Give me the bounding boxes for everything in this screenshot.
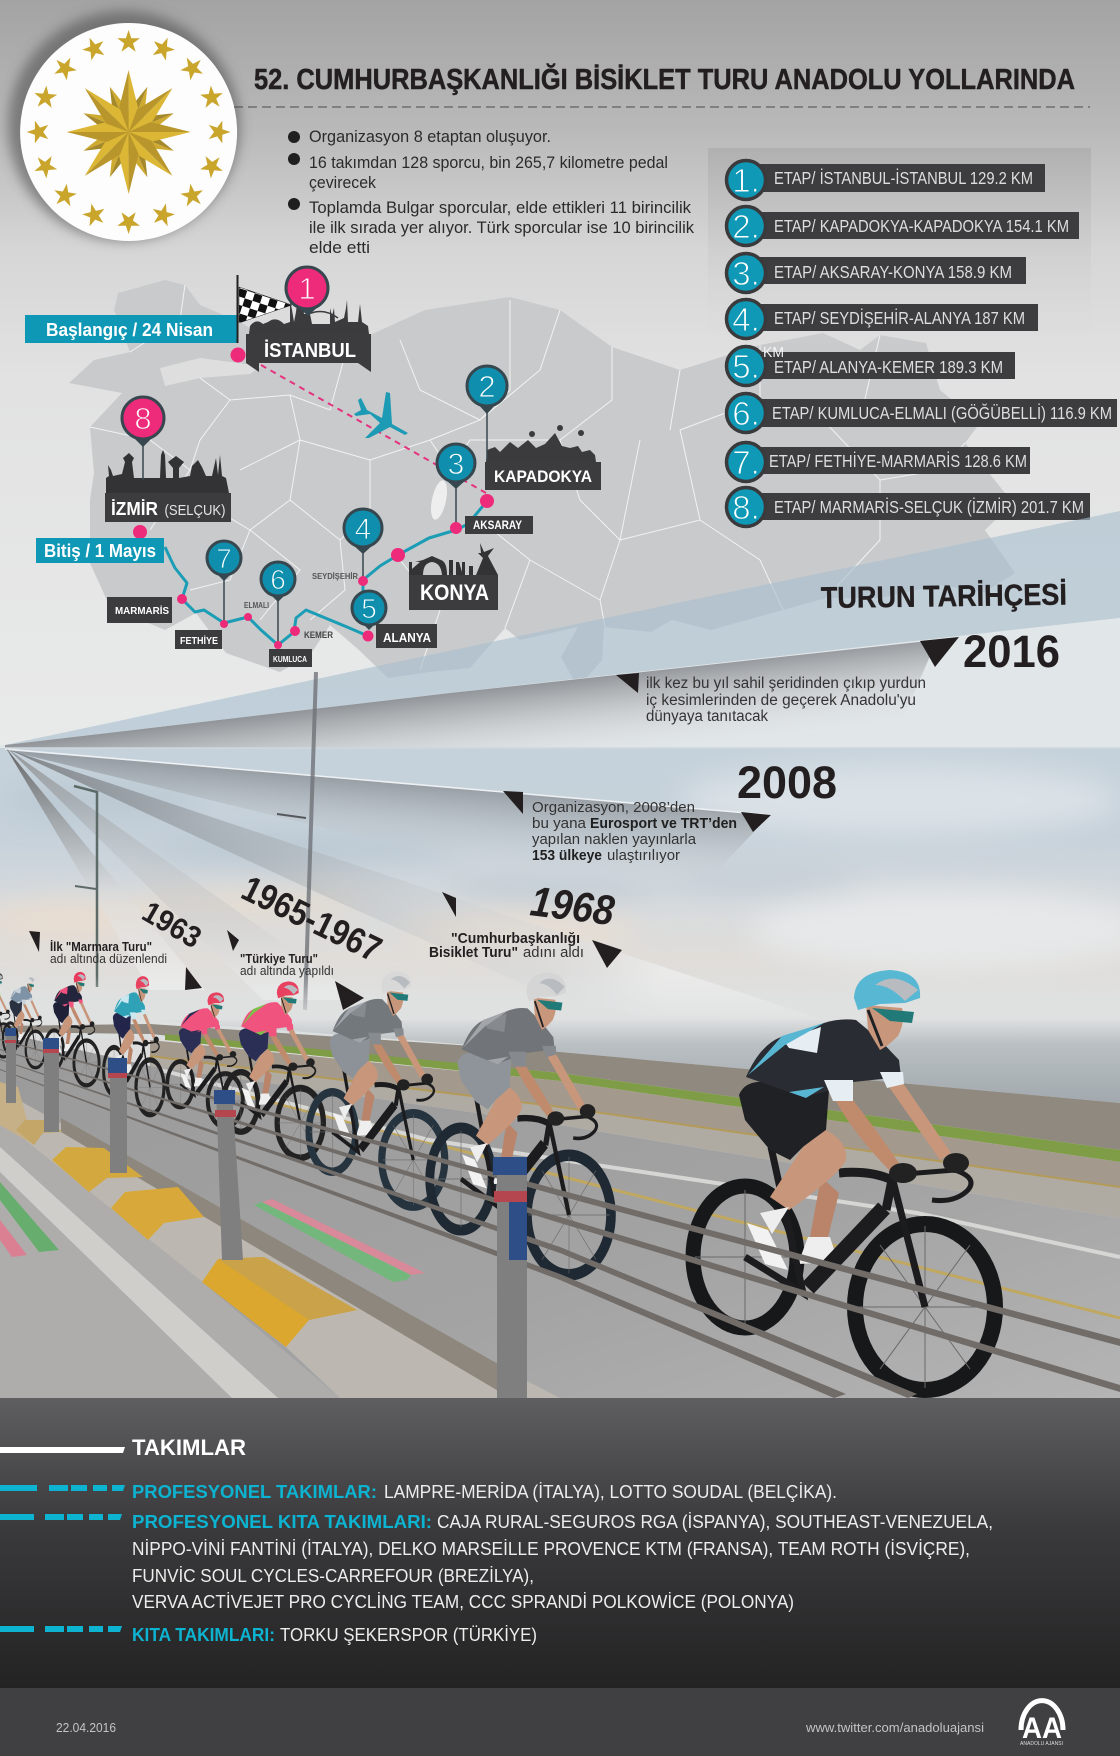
footer: date: 22.04.2016 [56, 1720, 116, 1735]
panel: stage list: 4. [732, 301, 760, 338]
timeline 2008: 2008 [737, 757, 837, 808]
dot: Marmaris [177, 594, 187, 604]
label: Kumluca [269, 649, 312, 667]
start label [25, 315, 237, 343]
dot: Konya [391, 548, 405, 562]
wedge: 1963 [6, 748, 205, 990]
label: Fethiye [175, 630, 222, 649]
dot: Kemer [290, 626, 300, 636]
panel: stage list: 2. [732, 208, 760, 245]
Izmir skyline and label: (SELÇUK) [164, 502, 226, 519]
team list [0, 1481, 993, 1645]
team list: PROFESYONEL TAKIMLAR: [132, 1481, 377, 1502]
heading: teams: TAKIMLAR [132, 1435, 246, 1460]
dot: Istanbul start [230, 348, 246, 362]
dot: Kapadokya end of flight [480, 494, 494, 508]
text block: key facts [288, 128, 695, 257]
pin 3 [437, 444, 475, 523]
finish label: Bitiş / 1 Mayıs [44, 541, 156, 561]
team list: VERVA ACTİVEJET PRO CYCLİNG TEAM, CCC SPRANDİ POLKOWİCE (POLONYA) [132, 1591, 794, 1612]
timeline 2016: dünyaya tanıtacak [646, 708, 768, 725]
timeline 2008: ulaştırılıyor [607, 847, 680, 864]
timeline 1965-1967: 1965-1967 [235, 867, 388, 970]
pin 4: 4 [355, 513, 371, 546]
text block: key facts: 16 takımdan 128 sporcu, bin 265,7 kilometre pedal [309, 154, 668, 172]
wedge: 1965-1967 [8, 749, 363, 1000]
team list: CAJA RURAL-SEGUROS RGA (İSPANYA), SOUTHEAST-VENEZUELA, [437, 1511, 993, 1532]
wedge: 1968 [10, 750, 824, 1020]
team list: PROFESYONEL KITA TAKIMLARI: [132, 1511, 432, 1532]
Istanbul skyline and label [246, 285, 371, 372]
panel: stage list: 8. [732, 489, 760, 526]
photo: road median with yellow blocks [0, 1082, 560, 1398]
Izmir skyline and label: İZMİR [111, 499, 158, 519]
team list: KITA TAKIMLARI: [132, 1624, 275, 1645]
pin 6: 6 [270, 564, 286, 595]
panel: stage list backdrop [708, 148, 1091, 348]
text block: key facts: Organizasyon 8 etaptan oluşuyor. [309, 128, 551, 146]
timeline 2016: ilk kez bu yıl sahil şeridinden çıkıp yurdun [646, 675, 926, 692]
label: Elmalı: ELMALI [244, 601, 269, 610]
team list: TORKU ŞEKERSPOR (TÜRKİYE) [280, 1624, 537, 1645]
panel: stage list: ETAP/ İSTANBUL-İSTANBUL 129.2 KM [774, 168, 1033, 188]
pin 1 [286, 267, 328, 316]
pin 6 [261, 562, 295, 643]
wedge: 2008 [5, 750, 770, 900]
pin 5 [352, 591, 386, 630]
text block: key facts: ile ilk sırada yer alıyor. Türk sporcular ise 10 birincilik [309, 219, 695, 237]
panel: stage list: 6. [732, 395, 760, 432]
panel: stage list: ETAP/ KAPADOKYA-KAPADOKYA 154.1 KM [774, 216, 1069, 236]
panel: stage list: ETAP/ ALANYA-KEMER 189.3 KM [774, 357, 1003, 377]
start label: Başlangıç / 24 Nisan [46, 320, 213, 340]
icon: cyclist group [0, 970, 995, 1390]
label: Aksaray: AKSARAY [473, 520, 522, 532]
Konya skyline and label: KONYA [420, 580, 489, 605]
timeline 1963: 1963 [136, 895, 207, 955]
label: Marmaris: MARMARİS [115, 604, 169, 617]
timeline 1968: 1968 [528, 877, 618, 934]
timeline 2008: 153 ülkeye [532, 847, 602, 864]
icon: airplane [354, 392, 408, 438]
lamp posts [74, 672, 316, 1010]
timeline 2016: iç kesimlerinden de geçerek Anadolu'yu [646, 692, 916, 709]
pin 8: 8 [134, 401, 152, 436]
route: Istanbul to Aksaray flight path [261, 365, 486, 493]
Izmir skyline and label [105, 450, 231, 522]
timeline 1965-1967: adı altında yapıldı [240, 963, 334, 978]
timeline 1963: adı altında düzenlendi [50, 951, 167, 966]
route: cycling stages [165, 501, 487, 645]
label: Kemer: KEMER [304, 630, 333, 640]
timeline 2016 [616, 626, 1060, 725]
timeline 2008: yapılan naklen yayınlarla [532, 831, 697, 848]
panel: stage list: 7. [732, 444, 760, 481]
blue band of 2016 wedge [5, 511, 1120, 745]
pin 7 [207, 541, 241, 622]
team list: LAMPRE-MERİDA (İTALYA), LOTTO SOUDAL (BELÇİKA). [384, 1481, 837, 1502]
dot: Kumluca [274, 641, 282, 649]
timeline 2008: bu yana [532, 815, 587, 832]
pin 2 [467, 366, 507, 460]
Kapadokya skyline and label: KAPADOKYA [494, 467, 592, 486]
dot: Fethiye [220, 620, 228, 628]
icon: Anadolu Agency logo: ANADOLU AJANSI [1020, 1741, 1063, 1747]
text block: key facts: Toplamda Bulgar sporcular, elde ettikleri 11 birincilik [309, 199, 692, 217]
dot: Aksaray [450, 522, 462, 534]
label: Alanya: ALANYA [383, 630, 432, 645]
team list: NİPPO-VİNİ FANTİNİ (İTALYA), DELKO MARSEİLLE PROVENCE KTM (FRANSA), TEAM ROTH (İSVİÇRE), [132, 1538, 970, 1559]
team list: FUNVİC SOUL CYCLES-CARREFOUR (BREZİLYA), [132, 1565, 534, 1586]
Konya skyline and label [409, 543, 498, 610]
panel: stage list: ETAP/ FETHİYE-MARMARİS 128.6 KM [769, 451, 1027, 471]
footer: twitter link: www.twitter.com/anadoluajansi [805, 1720, 984, 1735]
Kapadokya skyline and label [485, 425, 601, 490]
timeline 1968: "Cumhurbaşkanlığı [451, 930, 580, 947]
panel: stage list: 3. [732, 255, 760, 292]
wedge: 2016 shadow [5, 640, 937, 748]
dot: Izmir finish [133, 525, 147, 539]
panel: stage list [726, 160, 1117, 526]
timeline 2008: Organizasyon, 2008’den [532, 799, 695, 816]
panel: stage list: KM [763, 344, 784, 361]
dot: Seydişehir [358, 576, 368, 586]
pin 5: 5 [361, 593, 377, 624]
panel: stage list: 5. [732, 348, 760, 385]
text block: key facts: elde etti [309, 239, 370, 257]
Istanbul skyline and label: İSTANBUL [264, 339, 356, 362]
pin 3: 3 [448, 448, 464, 481]
sky backdrop [0, 618, 1120, 1038]
timeline 1963 [29, 895, 207, 990]
label: Fethiye: FETHİYE [180, 634, 218, 647]
pin 4 [344, 509, 382, 577]
icon: Anadolu Agency logo [1020, 1701, 1063, 1747]
timeline 1968: Bisiklet Turu" [429, 944, 518, 961]
dot: Elmalı [244, 613, 252, 621]
panel: stage list: ETAP/ SEYDİŞEHİR-ALANYA 187 KM [774, 308, 1025, 328]
timeline 1968 [429, 877, 622, 968]
page background [0, 0, 1120, 760]
emblem: presidential seal [8, 11, 240, 241]
panel: stage list: 1. [732, 162, 760, 199]
timeline 1965-1967 [227, 867, 388, 1010]
heading: tour history: TURUN TARİHÇESİ [821, 579, 1067, 615]
label: Kumluca: KUMLUCA [273, 655, 307, 664]
dot: Alanya [362, 630, 374, 642]
label: Seydişehir: SEYDİŞEHİR [312, 572, 358, 581]
pin 7: 7 [216, 543, 232, 574]
photo: guard rail posts and cables [0, 1028, 1120, 1398]
icon: Anadolu Agency logo: AA [1022, 1712, 1062, 1745]
map of Turkey [69, 280, 1015, 688]
photo: seafront and road [0, 975, 1120, 1398]
panel: stage list: ETAP/ AKSARAY-KONYA 158.9 KM [774, 262, 1012, 282]
label: Aksaray [465, 516, 533, 534]
timeline 2008 [503, 757, 837, 864]
pin 8 [122, 397, 164, 480]
label: Marmaris [107, 597, 172, 623]
dark panel: teams [0, 1398, 1120, 1688]
text block: key facts: çevirecek [309, 174, 377, 192]
timeline 1965-1967: "Türkiye Turu" [240, 951, 318, 966]
timeline 1968: adını aldı [523, 944, 584, 961]
footer bar [0, 1688, 1120, 1756]
timeline 1963: İlk "Marmara Turu" [50, 939, 152, 954]
timeline 2016: 2016 [963, 626, 1060, 677]
icon: checkered flag [238, 275, 292, 343]
pin 2: 2 [478, 369, 496, 404]
label: Alanya [376, 624, 437, 648]
pin 1: 1 [298, 271, 316, 306]
heading: teams [0, 1435, 246, 1460]
timeline 2008: Eurosport ve TRT’den [590, 815, 737, 832]
